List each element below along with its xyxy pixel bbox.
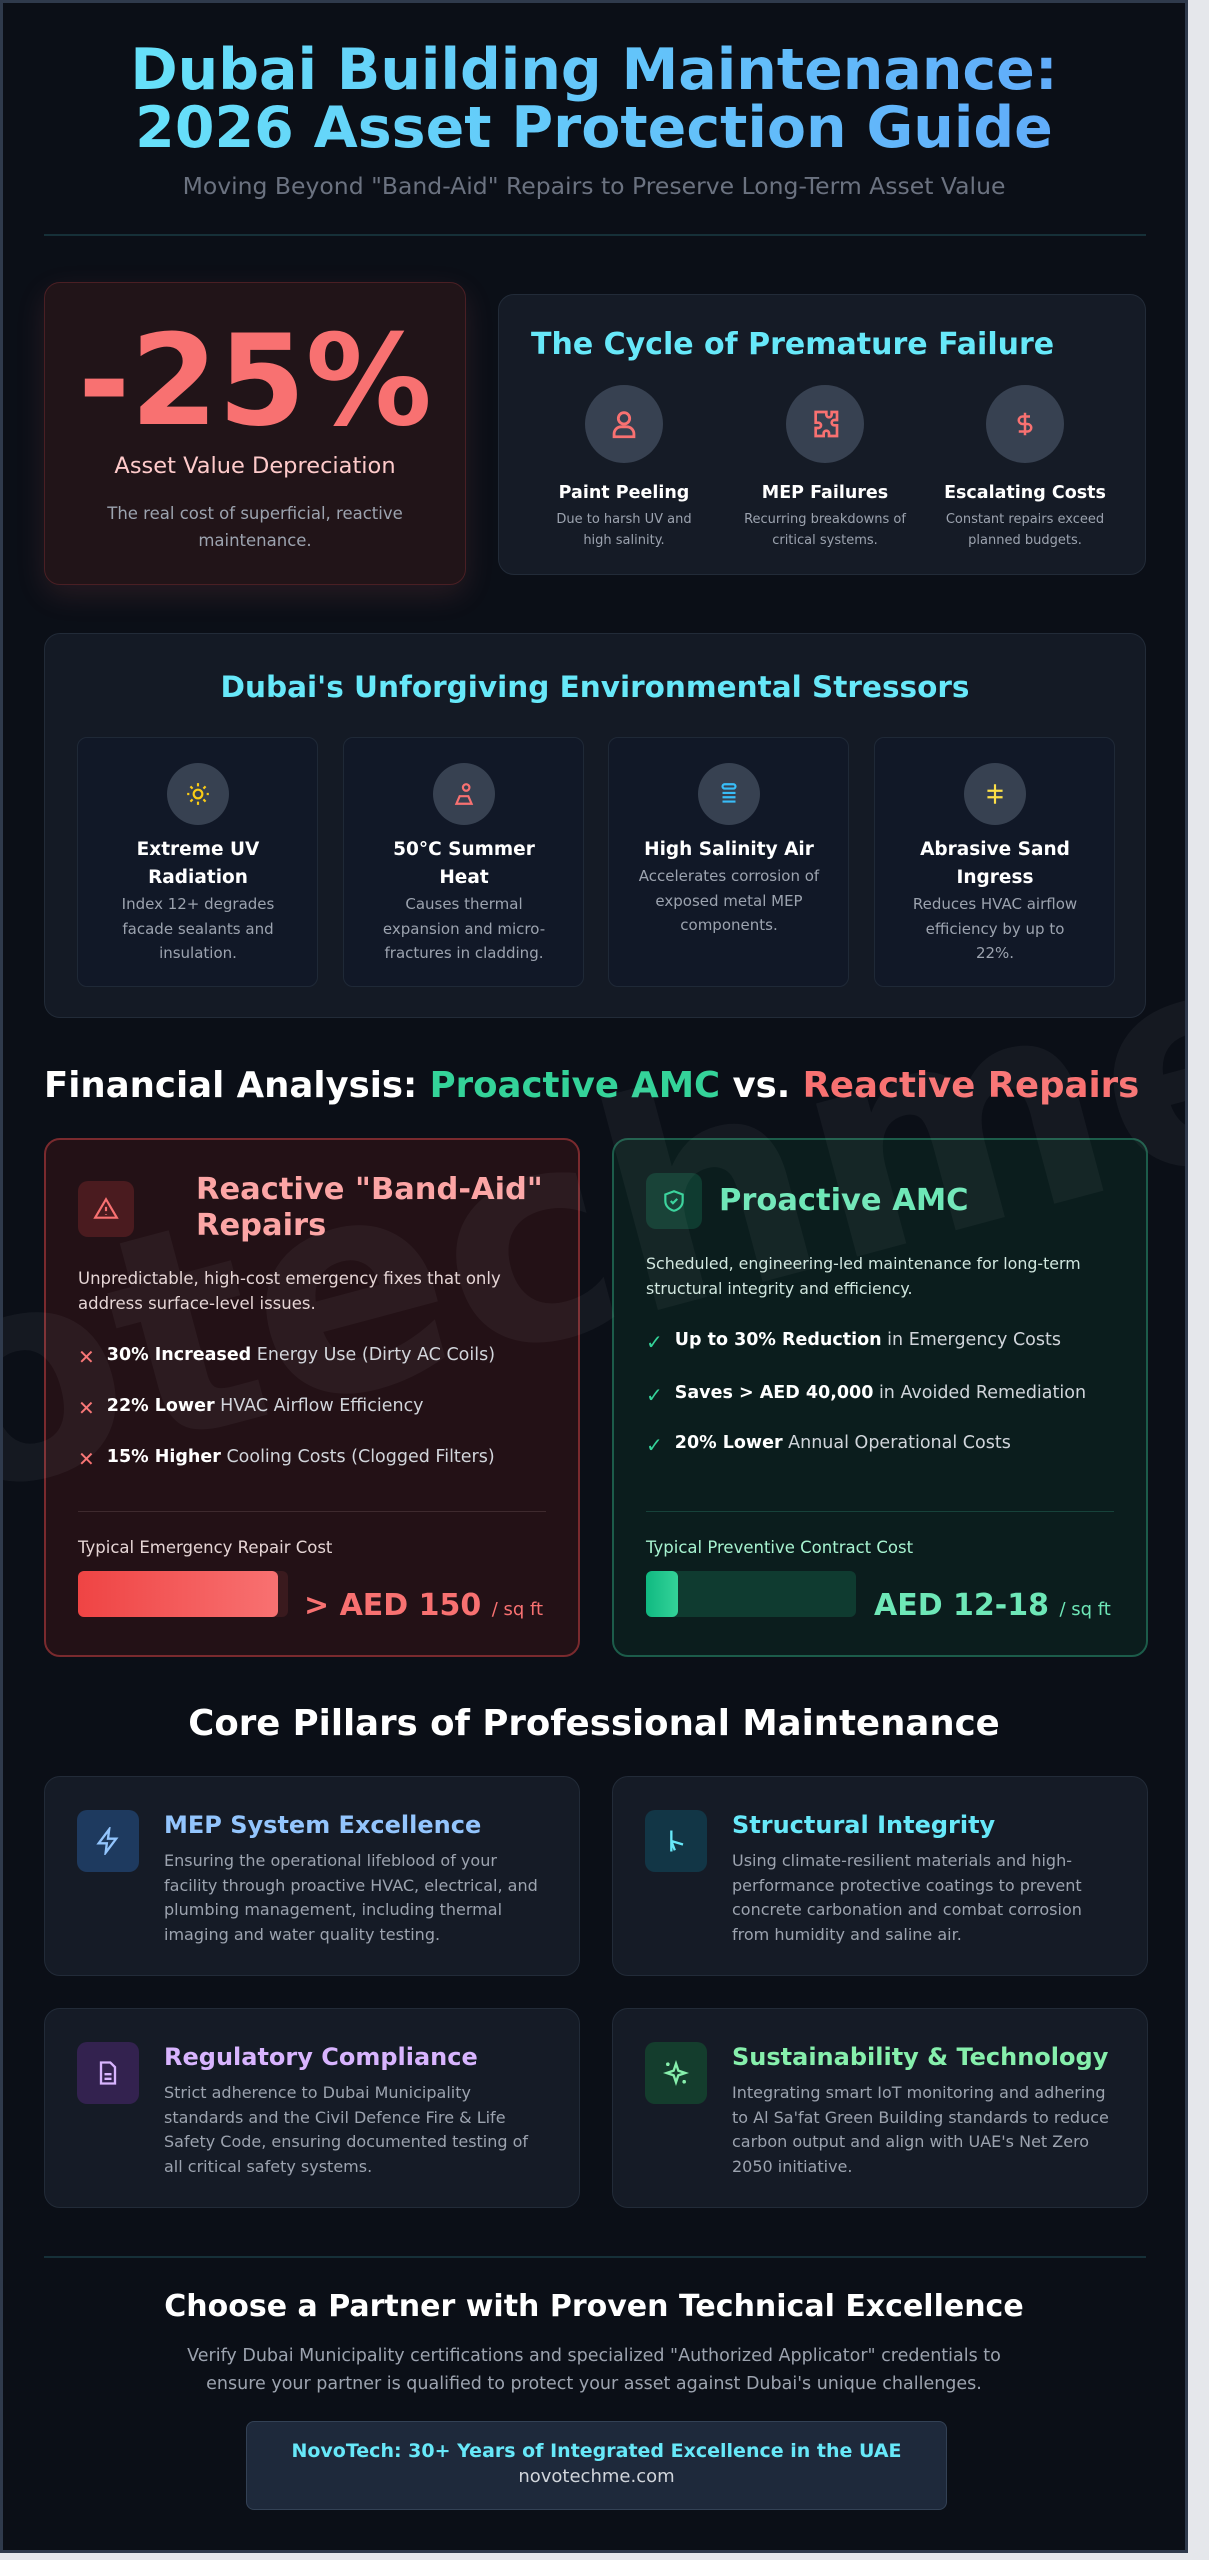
card: heat: 50°C Summer Heat: [393, 839, 535, 888]
item: mep failures: MEP Failures: [762, 483, 888, 503]
cost value: > AED 150 / sq ft: [304, 1588, 543, 1623]
heading: core pillars: Core Pillars of Professional Maintenance: [188, 1703, 1000, 1744]
paragraph: Verify Dubai Municipality certifications and specialized "Authorized Applicator" credentials to ensure your partner is qualified to protect your asset against Dubai's unique challenges.: [187, 2346, 1001, 2394]
bullet list: ✓ Saves > AED 40,000 in Avoided Remediation: [646, 1383, 1086, 1407]
card: heat: [343, 737, 584, 987]
panel: reactive repairs: [44, 1138, 580, 1657]
card: UV: [77, 737, 318, 987]
card: salinity: Accelerates corrosion of exposed metal MEP components.: [639, 867, 819, 934]
description: Unpredictable, high-cost emergency fixes that only address surface-level issues.: [78, 1269, 501, 1312]
CTA box: novotechme.com: [518, 2466, 675, 2487]
icon: document: [77, 2042, 139, 2104]
icon: warning: [78, 1181, 134, 1237]
card: sand: Reduces HVAC airflow efficiency by up to 22%.: [913, 895, 1077, 962]
panel: environmental stressors: [44, 633, 1146, 1018]
icon: sun: [167, 763, 229, 825]
pillar: MEP: [44, 1776, 580, 1976]
big number: -25%: [78, 307, 432, 454]
heading: choose a partner: Choose a Partner with Proven Technical Excellence: [164, 2289, 1024, 2324]
bullet list: ✕ 15% Higher Cooling Costs (Clogged Filters): [78, 1447, 495, 1471]
icon: sand: [964, 763, 1026, 825]
pillar: sustainability: Integrating smart IoT monitoring and adhering to Al Sa'fat Green Building standards to reduce carbon output and align with UAE's Net Zero 2050 initiative.: [732, 2083, 1109, 2176]
bullet list: ✕ 22% Lower HVAC Airflow Efficiency: [78, 1396, 424, 1420]
icon: dollar: [986, 385, 1064, 463]
label: Asset Value Depreciation: [114, 453, 396, 479]
pillar: structural: [612, 1776, 1148, 1976]
panel: depreciation stat: [44, 282, 466, 585]
cost label: Typical Emergency Repair Cost: [78, 1538, 332, 1557]
panel: cycle of premature failure: [498, 294, 1146, 575]
CTA box: NovoTech: 30+ Years of Integrated Excellence in the UAE: [291, 2440, 902, 2462]
icon: layers: [698, 763, 760, 825]
pillar: MEP: Ensuring the operational lifeblood of your facility through proactive HVAC, electrical, and plumbing management, including thermal imaging and water quality testing.: [164, 1851, 538, 1944]
pillar: compliance: [44, 2008, 580, 2208]
title: [3, 41, 1185, 157]
pillar: compliance: Strict adherence to Dubai Municipality standards and the Civil Defence Fire & Life Safety Code, ensuring documented testing of all critical safety systems.: [164, 2083, 528, 2176]
icon: bolt: [77, 1810, 139, 1872]
bullet list: [646, 1330, 1086, 1457]
heading: Proactive AMC: [719, 1183, 969, 1218]
item: paint peeling: Due to harsh UV and high salinity.: [556, 512, 692, 548]
pillar: sustainability: [612, 2008, 1148, 2208]
heading: financial analysis: Financial Analysis: Proactive AMC vs. Reactive Repairs: [44, 1065, 1139, 1106]
item: escalating costs: Escalating Costs: [944, 483, 1106, 503]
item: escalating costs: Constant repairs exceed planned budgets.: [946, 512, 1104, 548]
heading: Reactive "Band-Aid" Repairs: [196, 1172, 543, 1243]
bullet list: ✓ 20% Lower Annual Operational Costs: [646, 1433, 1011, 1457]
title: 2026 Asset Protection Guide: [135, 95, 1053, 161]
bullet list: ✓ Up to 30% Reduction in Emergency Costs: [646, 1330, 1061, 1354]
card: sand: [874, 737, 1115, 987]
pillar: compliance: Regulatory Compliance: [164, 2043, 478, 2071]
icon: shield: [646, 1173, 702, 1229]
icon: crane: [645, 1810, 707, 1872]
heading: The Cycle of Premature Failure: [531, 327, 1054, 362]
cost value: AED 12-18 / sq ft: [874, 1588, 1111, 1623]
card: salinity: [608, 737, 849, 987]
card: heat: Causes thermal expansion and micro-fractures in cladding.: [383, 895, 545, 962]
card: UV: Index 12+ degrades facade sealants and insulation.: [122, 895, 274, 962]
card: sand: Abrasive Sand Ingress: [920, 839, 1070, 888]
item: mep failures: Recurring breakdowns of critical systems.: [744, 512, 906, 548]
description: The real cost of superficial, reactive maintenance.: [107, 504, 403, 550]
pillar: structural: Structural Integrity: [732, 1811, 995, 1839]
pillar: MEP: MEP System Excellence: [164, 1811, 481, 1839]
title: Dubai Building Maintenance:: [130, 37, 1058, 103]
bullet list: ✕ 30% Increased Energy Use (Dirty AC Coils): [78, 1345, 495, 1369]
pillar: structural: Using climate-resilient materials and high-performance protective coatings to prevent concrete carbonation and combat corrosion from humidity and saline air.: [732, 1851, 1082, 1944]
bar: [78, 1571, 288, 1617]
pillar: sustainability: Sustainability & Technology: [732, 2043, 1108, 2071]
icon: puzzle: [786, 385, 864, 463]
subtitle: Moving Beyond "Band-Aid" Repairs to Preserve Long-Term Asset Value: [183, 172, 1005, 200]
description: Scheduled, engineering-led maintenance for long-term structural integrity and efficiency.: [646, 1254, 1081, 1298]
CTA box: [246, 2421, 947, 2510]
bar: [646, 1571, 856, 1617]
item: paint peeling: [556, 385, 692, 548]
item: paint peeling: Paint Peeling: [559, 483, 689, 503]
card: salinity: High Salinity Air: [644, 839, 814, 860]
icon: sparkle: [645, 2042, 707, 2104]
icon: person: [585, 385, 663, 463]
icon: thermometer: [433, 763, 495, 825]
item: escalating costs: [944, 385, 1106, 548]
heading: Dubai's Unforgiving Environmental Stressors: [221, 670, 969, 704]
item: mep failures: [744, 385, 906, 548]
panel: proactive AMC: [612, 1138, 1148, 1657]
cost label: Typical Preventive Contract Cost: [646, 1538, 913, 1557]
bullet list: [78, 1345, 495, 1471]
card: UV: Extreme UV Radiation: [137, 839, 259, 888]
